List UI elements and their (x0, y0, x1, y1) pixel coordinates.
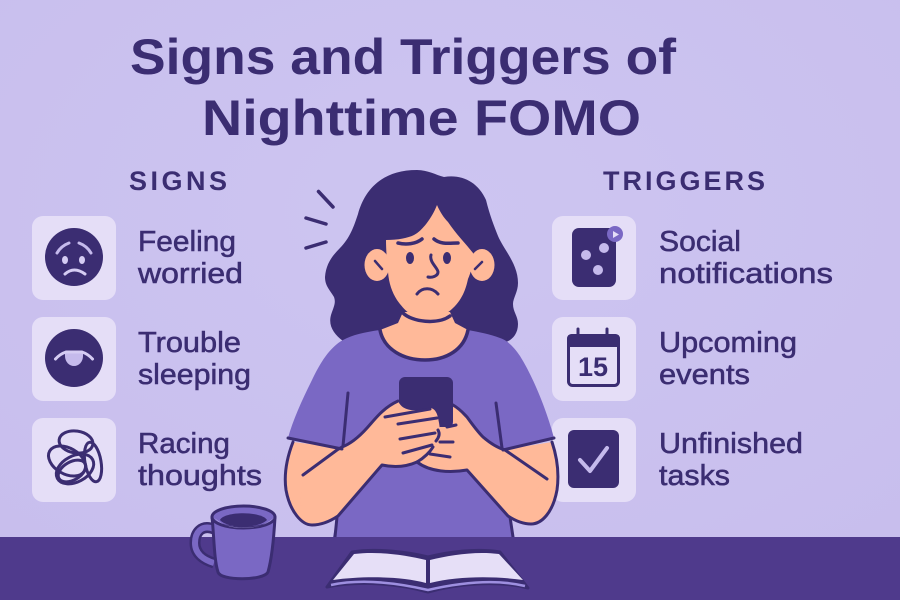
jaw line (403, 313, 450, 321)
trigger: social notifications (552, 216, 833, 300)
sign: racing thoughts: Racing (138, 428, 230, 460)
title: Signs and Triggers of (130, 29, 676, 85)
person (285, 170, 558, 537)
icon: worry tick marks (306, 192, 333, 248)
sleeve creases (335, 393, 513, 537)
trigger: upcoming events: 15 (578, 352, 608, 382)
panel: signs (32, 166, 262, 502)
collar line (380, 330, 468, 360)
trigger: unfinished tasks (552, 418, 803, 502)
trigger: upcoming events: events (659, 359, 750, 391)
sign: racing thoughts (32, 418, 262, 502)
hair (325, 170, 518, 342)
icon: coffee mug (195, 506, 275, 579)
trigger: social notifications: Social (659, 226, 741, 258)
face (386, 205, 473, 320)
icon: open book (327, 550, 528, 592)
arm: right (450, 440, 558, 524)
trigger: unfinished tasks: tasks (659, 460, 730, 492)
sign: feeling worried: worried (137, 258, 243, 290)
heading: signs: SIGNS (129, 166, 227, 196)
panel: triggers (552, 166, 833, 502)
hand: right (417, 405, 547, 517)
sign: trouble sleeping: Trouble (138, 327, 241, 359)
arm: left (285, 440, 398, 525)
sign: trouble sleeping: sleeping (138, 359, 251, 391)
trigger: social notifications: notifications (659, 258, 833, 290)
desk (0, 537, 900, 600)
neck (380, 312, 468, 360)
facial features (398, 239, 458, 294)
shirt (288, 330, 554, 537)
trigger: unfinished tasks: Unfinished (659, 428, 803, 460)
sign: feeling worried (32, 216, 243, 300)
title: Nighttime FOMO (202, 90, 641, 146)
heading: triggers: TRIGGERS (603, 166, 765, 196)
hand and arm outlines (285, 401, 558, 525)
sign: feeling worried: Feeling (138, 226, 236, 258)
ears (364, 249, 494, 281)
phone (399, 377, 453, 427)
trigger: upcoming events: Upcoming (659, 327, 797, 359)
hand: left (300, 401, 440, 516)
sign: racing thoughts: thoughts (138, 460, 262, 492)
title (130, 29, 676, 146)
trigger: upcoming events (552, 317, 797, 401)
sign: trouble sleeping (32, 317, 251, 401)
